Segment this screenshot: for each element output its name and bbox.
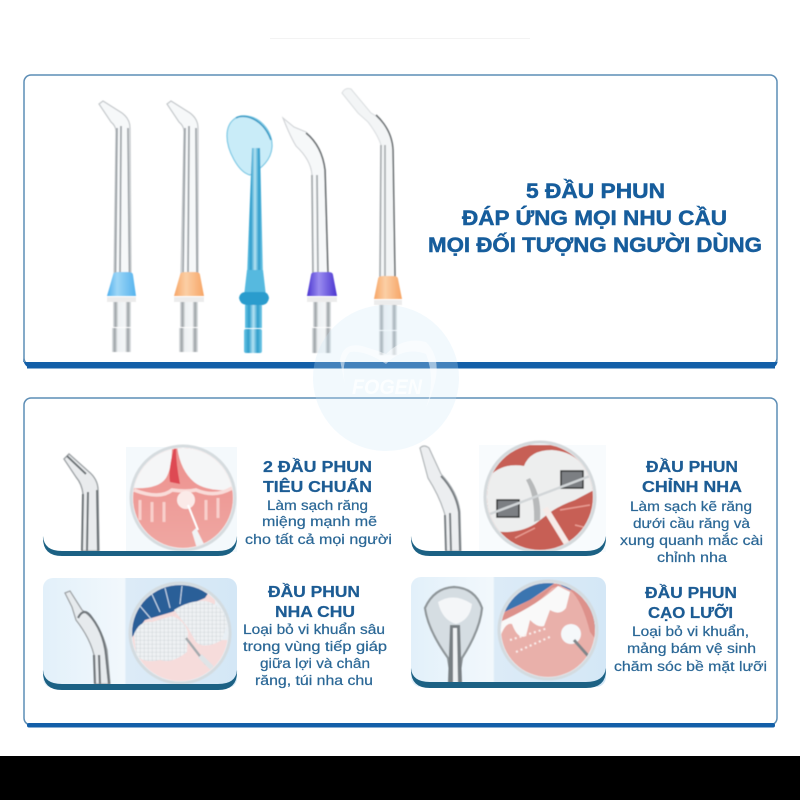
text: tongue scraper nozzle: mảng bám vệ sinh (627, 641, 756, 656)
text: orthodontic nozzle: CHỈNH NHA (642, 479, 742, 496)
nozzle: standard blue collar (99, 101, 136, 352)
illustration: braces cleaning (485, 442, 595, 552)
nozzles row (99, 88, 402, 355)
text: periodontal nozzle: giữa lợi và chân (260, 656, 370, 671)
card base curve (43, 670, 237, 690)
panel: nozzle details (24, 398, 777, 728)
panel: five nozzles (23, 75, 778, 368)
text: orthodontic nozzle: dưới cầu răng và (633, 516, 751, 531)
text: periodontal nozzle: Loại bỏ vi khuẩn sâu (243, 622, 385, 637)
card base curve (411, 536, 606, 556)
card: orthodontic nozzle (411, 442, 763, 565)
text: standard nozzle (245, 459, 392, 547)
faint top line (270, 38, 530, 39)
card base curve (411, 668, 606, 688)
text: periodontal nozzle: trong vùng tiếp giáp (243, 639, 387, 654)
text: tongue scraper nozzle: CẠO LƯỠI (648, 604, 733, 622)
text: orthodontic nozzle: Làm sạch kẽ răng (630, 499, 752, 514)
text: tongue scraper nozzle: ĐẦU PHUN (645, 585, 737, 602)
text: orthodontic nozzle: ĐẦU PHUN (646, 459, 738, 476)
nozzle: blue tongue scraper (227, 116, 272, 353)
text: standard nozzle: TIÊU CHUẨN (263, 478, 372, 496)
illustration: gum cleaning (130, 446, 236, 552)
text: orthodontic nozzle: chỉnh nha (657, 550, 728, 565)
text: standard nozzle: cho tất cả mọi người (245, 532, 392, 547)
text: periodontal nozzle (243, 584, 387, 688)
text: tongue scraper nozzle: Loại bỏ vi khuẩn, (632, 624, 749, 639)
card base curve (43, 536, 237, 556)
watermark: FOGEN logo (313, 305, 459, 451)
icon: tongue scraper tip (425, 587, 482, 683)
nozzle: standard orange collar (167, 101, 204, 352)
card: periodontal nozzle (43, 578, 387, 690)
text: standard nozzle: Làm sạch răng (267, 498, 368, 513)
text: tongue scraper nozzle (614, 585, 767, 674)
heading: MỌI ĐỐI TƯỢNG NGƯỜI DÙNG (428, 233, 762, 257)
text: tongue scraper nozzle: chăm sóc bề mặt lưỡi (614, 659, 767, 674)
black bottom bar (0, 756, 800, 800)
icon: orthodontic nozzle tip (420, 446, 461, 551)
text: periodontal nozzle: ĐẦU PHUN (268, 584, 360, 601)
text: orthodontic nozzle: xung quanh mắc cài (620, 533, 763, 548)
heading: 5 ĐẦU PHUN (526, 180, 665, 203)
heading: ĐÁP ỨNG MỌI NHU CẦU (462, 206, 727, 230)
text: periodontal nozzle: răng, túi nha chu (255, 673, 373, 688)
text: standard nozzle: 2 ĐẦU PHUN (263, 459, 372, 476)
nozzle: periodontal purple collar (283, 118, 337, 353)
text: periodontal nozzle: NHA CHU (275, 604, 355, 621)
illustration: tongue cleaning (498, 580, 598, 680)
nozzle: orthodontic orange collar (342, 88, 402, 355)
card: tongue scraper nozzle (411, 577, 767, 688)
heading (428, 180, 762, 257)
text: standard nozzle: miệng mạnh mẽ (262, 514, 377, 529)
icon: periodontal nozzle tip (65, 591, 110, 684)
card: standard nozzle (43, 446, 392, 556)
illustration: periodontal cleaning (130, 583, 230, 683)
text: orthodontic nozzle (620, 459, 763, 565)
watermark: FOGEN logo: FOGEN (352, 376, 423, 399)
icon: standard nozzle tip (64, 454, 99, 551)
